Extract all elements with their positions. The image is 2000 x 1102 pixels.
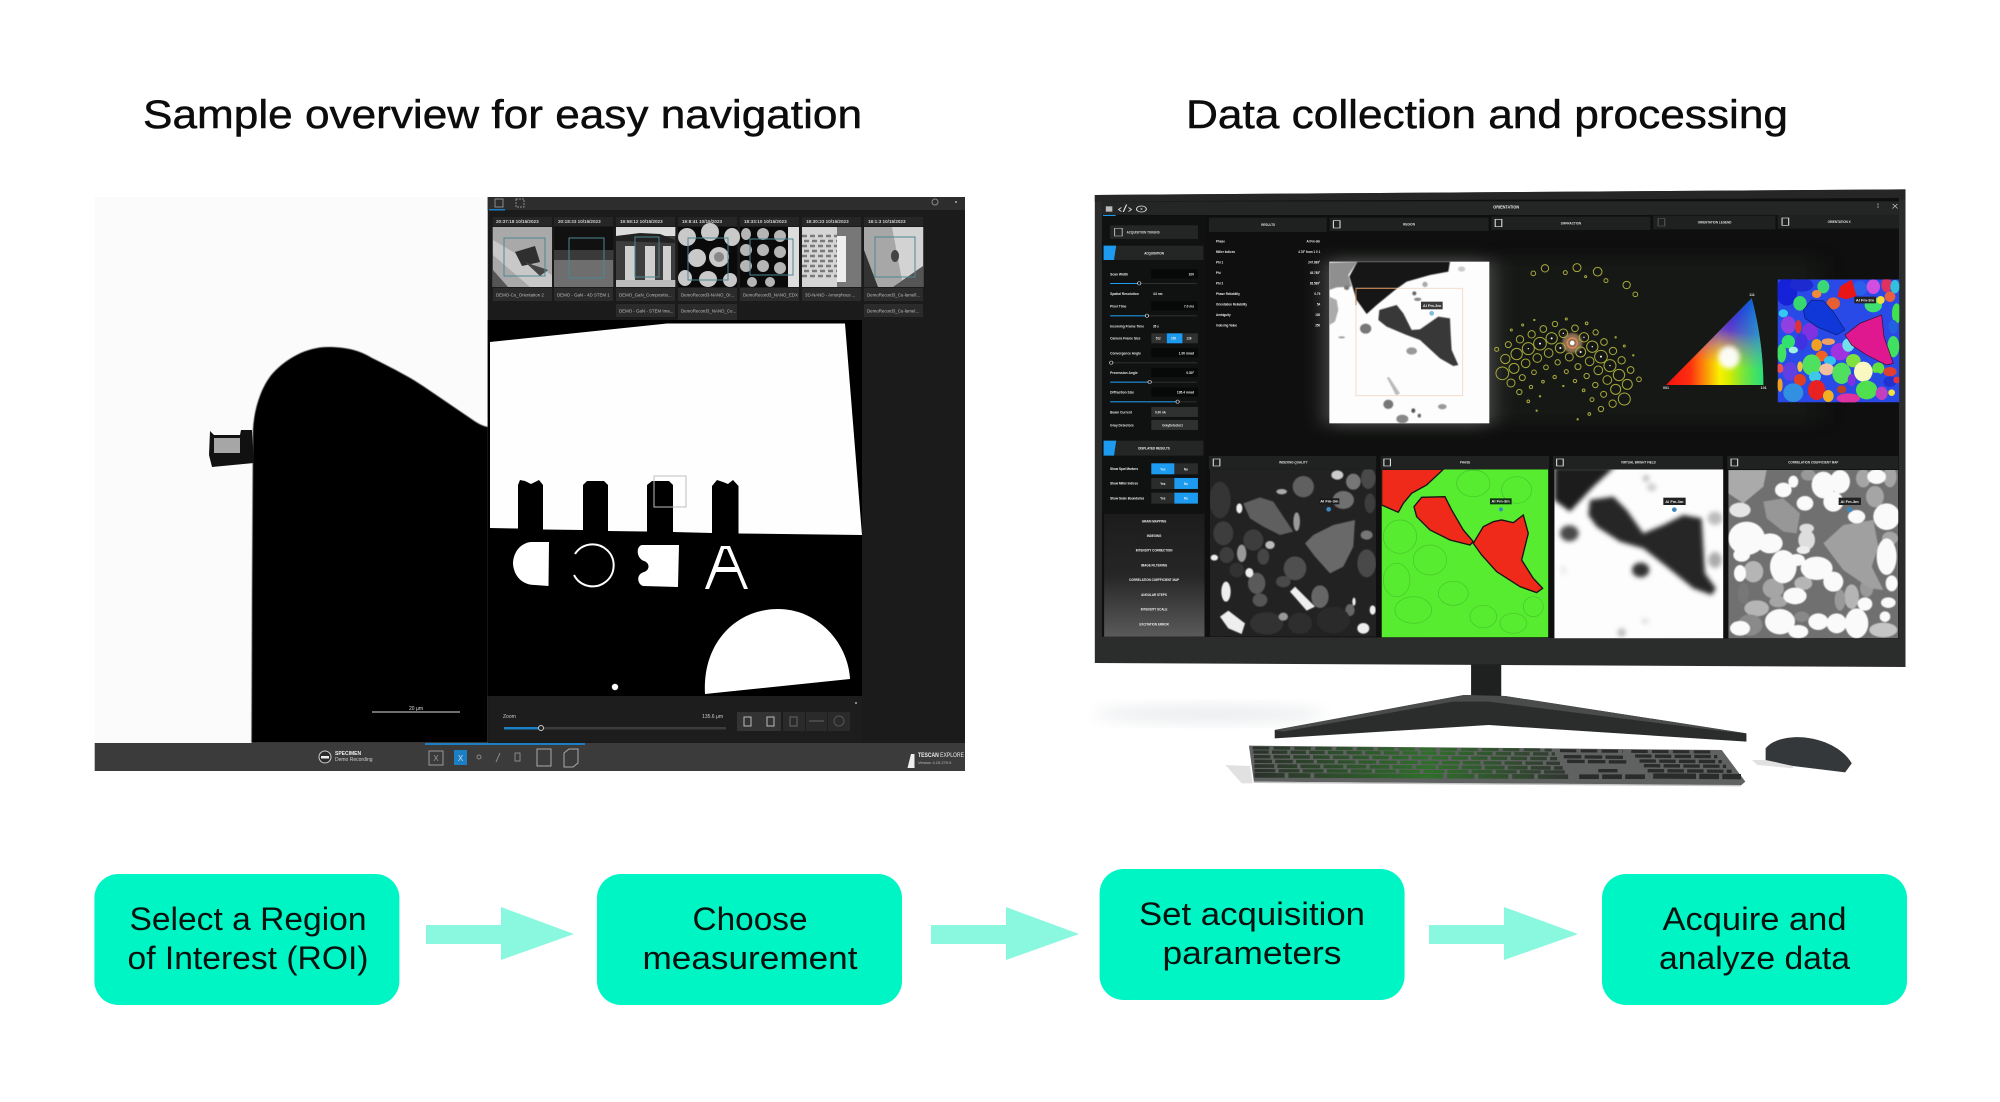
collapsed settings list: CORRELATION COEFFICIENT MAP bbox=[1129, 578, 1180, 582]
bottom toolbar: Version 4.15.279.0 bbox=[918, 760, 952, 765]
bright field image: Al Fm-3m bbox=[1423, 303, 1442, 308]
monitor base bbox=[1275, 695, 1746, 742]
results table: 45.785° bbox=[1310, 271, 1321, 275]
main image viewport bbox=[488, 320, 862, 696]
map: indexing quality: Al Fm-3m bbox=[1320, 499, 1339, 504]
monitor with user interface bbox=[1095, 189, 1905, 786]
displayed results header bbox=[1104, 441, 1203, 456]
tab headers: REGION bbox=[1403, 222, 1416, 226]
top bezel bbox=[1095, 189, 1905, 202]
keyboard shadow bbox=[1225, 765, 1253, 783]
tab headers: RESULTS bbox=[1261, 223, 1276, 227]
window title bar: ⁞ bbox=[1877, 203, 1879, 209]
results table: Miller Indices bbox=[1216, 250, 1235, 254]
bottom toolbar: SPECIMEN bbox=[335, 751, 362, 757]
title: sample overview: Sample overview for easy navigation bbox=[143, 93, 862, 137]
thumbnail dates: 19:8:41 10/15/2023 bbox=[682, 219, 723, 224]
diffraction rings bbox=[1495, 264, 1641, 420]
letter B bbox=[638, 545, 679, 587]
acquisition controls: 0.50° bbox=[1186, 371, 1195, 375]
results table: 100 bbox=[1315, 313, 1320, 317]
mouse shadow bbox=[1752, 760, 1793, 768]
acquisition controls bbox=[1110, 269, 1198, 430]
thumbnail caption text: DemoRecord3_NANO_Co... bbox=[681, 308, 736, 314]
acquisition controls: Diffraction Size bbox=[1110, 390, 1134, 395]
thumbnail dates bbox=[496, 219, 906, 224]
micrograph background bbox=[95, 197, 488, 743]
thumbnail 1 bbox=[493, 227, 552, 287]
lower map headers: VIRTUAL BRIGHT FIELD bbox=[1621, 460, 1656, 465]
results table: 0.79 bbox=[1314, 292, 1320, 296]
results table: Phase Reliability bbox=[1216, 292, 1240, 296]
step 1 box: Select a Region bbox=[130, 901, 366, 937]
results table: 250 bbox=[1315, 323, 1320, 327]
window title bar bbox=[1102, 201, 1899, 216]
lower map headers: INDEXING QUALITY bbox=[1279, 460, 1308, 465]
acquisition controls: Precession Angle bbox=[1110, 371, 1138, 375]
thumbnail caption text: DEMO-Cu_Orientation 2 bbox=[496, 292, 544, 298]
map: virtual bright field bbox=[1554, 467, 1723, 638]
acquisition controls: Incoming Frame Time bbox=[1110, 324, 1144, 328]
grain boundaries bbox=[1383, 470, 1543, 633]
screen base bbox=[1102, 198, 1899, 639]
bright field image bbox=[1329, 262, 1489, 423]
acquisition controls: 128 bbox=[1186, 336, 1192, 341]
thumbnail caption text bbox=[496, 292, 920, 314]
white sample foil bbox=[490, 324, 862, 535]
collapsed settings list: ANGULAR STEPS bbox=[1141, 593, 1168, 597]
monitor body bbox=[1095, 189, 1905, 667]
sample silhouette bbox=[252, 347, 488, 743]
results table: 83.589° bbox=[1310, 281, 1321, 286]
central spot bbox=[1567, 338, 1577, 348]
acquisition controls: 256 bbox=[1171, 336, 1176, 341]
thumbnail dates: 19:58:12 10/15/2023 bbox=[620, 219, 663, 224]
step 1 box bbox=[94, 874, 399, 1005]
orientation map: Al Fm-3m bbox=[1856, 297, 1875, 302]
etched letters bbox=[513, 542, 748, 589]
bright spots bbox=[1528, 333, 1611, 366]
key rows bbox=[1253, 748, 1568, 777]
dark interface area bbox=[488, 197, 965, 743]
scale bar: 20 µm bbox=[409, 706, 423, 712]
window title bar: ORIENTATION bbox=[1493, 204, 1519, 209]
thumbnail strip bbox=[493, 217, 923, 320]
collapsed settings list: INTENSITY SCALE bbox=[1141, 607, 1168, 612]
thumbnail top bar bbox=[488, 197, 965, 210]
sidebar bbox=[1102, 216, 1205, 637]
collapsed settings list bbox=[1104, 514, 1205, 637]
orientation legend triangle bbox=[1663, 293, 1767, 390]
acquisition controls: 35 s bbox=[1153, 324, 1159, 328]
acquisition header: ACQUISITION bbox=[1144, 251, 1164, 255]
map: phase bbox=[1382, 469, 1548, 637]
lower map headers bbox=[1209, 456, 1898, 469]
display toggles: Yes bbox=[1160, 482, 1166, 486]
results table: Phi 1 bbox=[1216, 260, 1223, 265]
orientation map bbox=[1776, 278, 1901, 403]
acquisition controls: Scan Width bbox=[1110, 272, 1128, 276]
results table: 247.689° bbox=[1308, 260, 1321, 265]
acquisition controls: Camera Frame Size bbox=[1110, 336, 1140, 341]
mouse bbox=[1766, 737, 1852, 772]
thumbnail 4 bbox=[678, 223, 740, 287]
stand and peripherals bbox=[1225, 664, 1852, 786]
glow behind bright field image bbox=[1327, 260, 1491, 425]
display toggles bbox=[1110, 463, 1198, 504]
screen ambient glow bbox=[1491, 257, 1820, 423]
needle tip object bbox=[209, 430, 254, 467]
display toggles: No bbox=[1184, 467, 1188, 471]
panel: sample overview screenshot bbox=[95, 197, 965, 771]
letter C bbox=[574, 544, 614, 586]
thumbnail dates: 20:37:18 10/15/2023 bbox=[496, 219, 539, 224]
acquisition controls: 512 bbox=[1156, 336, 1161, 341]
acquisition controls: Pixel Time bbox=[1110, 304, 1126, 308]
bottom toolbar bbox=[95, 743, 965, 771]
acquisition controls: 4.0 nm bbox=[1153, 292, 1162, 296]
thumbnail caption text: DemoRecord3-NANO_Or... bbox=[681, 292, 734, 298]
title: data collection: Data collection and processing bbox=[1186, 93, 1788, 137]
displayed results header: DISPLAYED RESULTS bbox=[1138, 446, 1171, 451]
window title bar: X bbox=[1892, 203, 1899, 210]
bottom toolbar: X bbox=[458, 754, 464, 763]
map: correlation coefficient: Al Fm-3m bbox=[1841, 499, 1859, 504]
results table: Indexing Value bbox=[1216, 323, 1237, 327]
thumbnail caption text: DemoRecord3_Cu-lamell... bbox=[867, 292, 920, 298]
map: indexing quality bbox=[1209, 468, 1376, 637]
collapsed settings list: EXCITATION ERROR bbox=[1139, 622, 1169, 626]
results table: 4.78° from 1 0 1 bbox=[1298, 250, 1320, 254]
acquisition controls: 7.0 ms bbox=[1184, 304, 1194, 308]
acquisition controls: 195.4 mrad bbox=[1177, 390, 1194, 395]
lower map headers: CORRELATION COEFFICIENT MAP bbox=[1788, 460, 1839, 465]
small particle bbox=[612, 684, 618, 690]
collapsed settings list: INTENSITY CORRECTION bbox=[1136, 548, 1173, 553]
bottom toolbar: X bbox=[433, 754, 439, 763]
thumbnail dates: 18:1:3 10/15/2023 bbox=[868, 219, 906, 224]
thumbnail caption text: DEMO - GaN - STEM Ima... bbox=[619, 308, 673, 314]
monitor body and interface bbox=[1095, 189, 1905, 667]
acquisition controls: 0.00 nA bbox=[1155, 410, 1166, 414]
step 1 box: of Interest (ROI) bbox=[128, 940, 368, 976]
step 2 box bbox=[597, 874, 902, 1005]
step 3 box: Set acquisition bbox=[1139, 896, 1365, 932]
orientation legend triangle: 001 bbox=[1663, 386, 1669, 390]
bottom toolbar: Demo Recording bbox=[335, 757, 373, 763]
monitor neck bbox=[1471, 664, 1501, 701]
collapsed settings list: GRAIN MAPPING bbox=[1142, 519, 1167, 523]
region of interest marker bbox=[654, 476, 686, 507]
thumbnail 2 bbox=[554, 227, 613, 287]
lower half disc bbox=[705, 609, 850, 694]
thumbnail caption text: DemoRecord3_Cu-lamel... bbox=[867, 308, 919, 314]
thumbnail 3 bbox=[616, 227, 675, 287]
orientation legend triangle: 101 bbox=[1761, 386, 1767, 390]
display toggles: Yes bbox=[1160, 467, 1166, 471]
results table: 54 bbox=[1317, 302, 1320, 306]
tab headers bbox=[1209, 215, 1899, 232]
step 3 box bbox=[1100, 869, 1405, 1000]
window title bar: ‹/› bbox=[1117, 203, 1133, 214]
sidebar: ACQUISITION TOKENS bbox=[1127, 230, 1160, 234]
phase grains bbox=[1382, 469, 1543, 593]
map: correlation coefficient bbox=[1728, 466, 1900, 638]
thumbnail 7 bbox=[864, 227, 923, 287]
acquisition controls: Beam Current bbox=[1110, 410, 1133, 414]
thumbnail dates: 18:33:10 10/15/2023 bbox=[744, 219, 787, 224]
letter D bbox=[513, 542, 549, 586]
map: phase: Al Fm-3m bbox=[1492, 499, 1510, 504]
navigation and number keys bbox=[1560, 751, 1741, 777]
results table: Ambiguity bbox=[1216, 313, 1231, 317]
thumbnail 5 bbox=[740, 227, 799, 287]
desk shadow bbox=[1095, 705, 1325, 723]
tab headers: ORIENTATION X bbox=[1828, 220, 1851, 224]
thumbnail caption text: DEMO_GaN_Compositio... bbox=[619, 292, 672, 298]
step 2 box: Choose bbox=[692, 901, 808, 937]
thumbnail dates: 18:30:23 10/15/2023 bbox=[806, 219, 849, 224]
zoom control panel: 135.6 µm bbox=[702, 714, 723, 720]
acquisition controls: GrayDetector1 bbox=[1162, 423, 1183, 427]
acquisition controls: Gray Detectors bbox=[1110, 423, 1134, 427]
collapsed settings list: INDEXING bbox=[1147, 534, 1162, 538]
tab headers: ORIENTATION LEGEND bbox=[1698, 220, 1732, 225]
acquisition controls: Spatial Resolution bbox=[1110, 292, 1139, 296]
letter A bbox=[705, 546, 748, 589]
large blue grain bbox=[1803, 300, 1845, 335]
step 2 box: measurement bbox=[642, 940, 858, 976]
tab headers: DIFFRACTION bbox=[1561, 221, 1582, 225]
display toggles: Show Scale Boundaries bbox=[1110, 496, 1144, 500]
results table bbox=[1216, 239, 1321, 327]
acquisition controls: 1.00 mrad bbox=[1179, 351, 1194, 355]
acquisition header bbox=[1104, 246, 1203, 260]
lower map headers: PHASE bbox=[1460, 460, 1471, 465]
keyboard bbox=[1249, 746, 1745, 786]
results table: Phase bbox=[1216, 239, 1225, 244]
thumbnail captions bbox=[493, 288, 923, 320]
thumbnail caption text: 3D-NAND - Amorphous ... bbox=[805, 292, 856, 298]
results table: Al Fm-3m bbox=[1307, 239, 1320, 244]
display toggles: Show Miller Indices bbox=[1110, 481, 1138, 486]
orientation legend triangle: 111 bbox=[1749, 293, 1755, 297]
results table: Phi bbox=[1216, 271, 1221, 275]
results table: Orientation Reliability bbox=[1216, 302, 1247, 306]
thumbnail headers bbox=[493, 217, 923, 226]
arrow 2 bbox=[931, 907, 1079, 960]
diffraction pattern bbox=[1495, 264, 1641, 420]
thumbnail 6 bbox=[802, 227, 861, 287]
acquisition controls: Convergence Angle bbox=[1110, 351, 1141, 355]
bottom toolbar: TESCAN EXPLORE bbox=[918, 752, 965, 759]
display toggles: No bbox=[1184, 496, 1188, 501]
step 4 box: analyze data bbox=[1659, 940, 1850, 976]
results table: Phi 2 bbox=[1216, 281, 1223, 286]
large pink grain bbox=[1845, 315, 1893, 365]
display toggles: Yes bbox=[1160, 496, 1166, 501]
display toggles: No bbox=[1184, 482, 1188, 486]
step 4 box bbox=[1602, 874, 1907, 1005]
thumbnail caption text: DEMO - GaN - 4D STEM 1 bbox=[557, 292, 610, 298]
arrow 3 bbox=[1429, 907, 1578, 960]
thumbnail dates: 20:18:33 10/15/2023 bbox=[558, 219, 601, 224]
arrow 1 bbox=[426, 907, 574, 960]
map: virtual bright field: Al Fm-3m bbox=[1665, 499, 1684, 504]
zoom control panel bbox=[490, 696, 862, 741]
zoom control panel: Zoom bbox=[503, 714, 516, 720]
acquisition controls: 100 bbox=[1189, 272, 1194, 276]
step 4 box: Acquire and bbox=[1662, 901, 1846, 937]
collapsed settings list: IMAGE FILTERING bbox=[1141, 563, 1168, 567]
thumbnail caption text: DemoRecord3_NANO_EDX bbox=[743, 292, 798, 298]
step 3 box: parameters bbox=[1162, 935, 1342, 971]
display toggles: Show Spot Markers bbox=[1110, 467, 1138, 471]
scale bar bbox=[372, 706, 460, 712]
